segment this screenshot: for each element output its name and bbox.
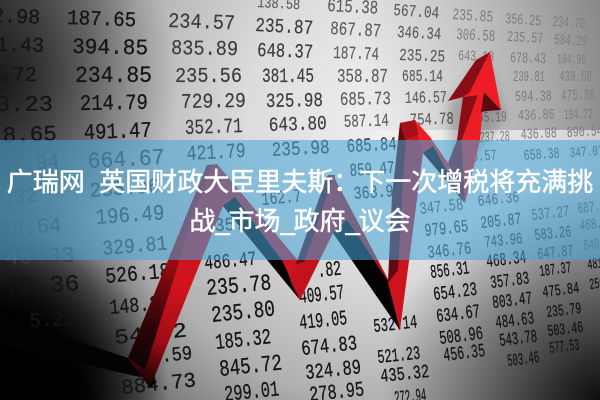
table of numbers: 148.32 — [109, 293, 170, 321]
table of numbers: 436.86 — [518, 107, 555, 125]
table of numbers: 526.18 — [104, 259, 171, 290]
table of numbers: 647.87 — [537, 242, 574, 264]
table of numbers: 835.89 — [171, 38, 238, 62]
arrow: second rising dark side — [296, 176, 333, 264]
table of numbers: 187.37 — [538, 259, 572, 281]
table of numbers: 979.65 — [424, 217, 469, 242]
table of numbers: 678.43 — [510, 50, 546, 68]
arrow: shaft bright face — [462, 92, 484, 203]
table of numbers: 358.87 — [337, 66, 388, 88]
table of numbers: 196.49 — [95, 201, 165, 231]
table of numbers: 468.34 — [485, 248, 527, 273]
table of numbers: 185.32 — [214, 325, 272, 356]
table of numbers: 346.76 — [427, 239, 472, 264]
table of numbers: 235.57 — [507, 29, 544, 48]
table of numbers: 235.56 — [175, 66, 242, 89]
arrow: third rising face — [388, 120, 423, 330]
table of numbers: 643.18 — [458, 48, 494, 66]
table of numbers: 347.58 — [419, 196, 464, 220]
table of numbers: 357.83 — [489, 269, 530, 294]
table of numbers: 646.36 — [477, 189, 520, 211]
table of numbers: 356.25 — [505, 11, 542, 30]
table of numbers: 234.85 — [75, 63, 152, 89]
table of numbers: 685.14 — [402, 68, 443, 87]
table of numbers: 685.84 — [346, 133, 397, 158]
table of numbers: 845.72 — [218, 351, 283, 383]
table of numbers: 187.65 — [67, 8, 137, 33]
table of numbers: 754.78 — [410, 110, 454, 131]
table of numbers: 421.79 — [186, 141, 246, 167]
table of numbers: 324.89 — [304, 357, 362, 386]
table of numbers: 306.58 — [456, 26, 496, 46]
table of numbers: 648.37 — [257, 40, 314, 65]
table of numbers: 486.47 — [204, 249, 257, 276]
arrow soft shadow — [448, 60, 505, 190]
table of numbers: 674.83 — [300, 333, 358, 362]
arrow: second falling face — [333, 175, 400, 330]
arrow: third falling face — [415, 120, 465, 203]
table of numbers: 45.33 — [4, 244, 75, 271]
table of numbers: 685.73 — [340, 88, 391, 111]
table of numbers: 475.84 — [541, 280, 580, 302]
table of numbers: 643.80 — [268, 113, 327, 138]
table of numbers: 235.80 — [210, 296, 276, 329]
table of numbers: 503.46 — [506, 349, 540, 372]
table of numbers: 214.79 — [80, 91, 148, 117]
table of numbers: 352.71 — [184, 116, 243, 141]
arrow: first rising bright face — [128, 164, 223, 388]
arrow: shaft dark side — [448, 95, 478, 203]
table of numbers: 162.7 — [261, 186, 302, 211]
table of numbers: 456.35 — [442, 340, 486, 367]
table of numbers: 537.27 — [531, 203, 570, 225]
table of numbers: 329.81 — [102, 233, 168, 262]
table of numbers: 235.25 — [399, 47, 445, 68]
table of numbers: 664.67 — [87, 145, 165, 175]
table of numbers: 38.64 — [0, 214, 62, 243]
table of numbers: 436.08 — [520, 125, 557, 144]
table of numbers: .82 — [316, 259, 343, 284]
table of numbers: 237.28 — [479, 128, 510, 147]
table of numbers: 729.29 — [181, 91, 246, 115]
table of numbers: 521.23 — [376, 343, 421, 369]
table of numbers: 491.47 — [83, 119, 152, 146]
translucent blue band — [0, 140, 600, 260]
table of numbers: 146.57 — [405, 89, 447, 109]
table of numbers: 5.21 — [29, 309, 75, 334]
table of numbers: 8.65 — [2, 122, 57, 149]
arrow: first falling face — [212, 164, 318, 300]
arrow: third rising dark side — [388, 122, 407, 283]
table of numbers: 368.9 — [353, 182, 394, 205]
table of numbers: .72 — [0, 65, 37, 88]
arrow: head right underside — [481, 92, 501, 112]
table of numbers: 484.63 — [494, 309, 535, 334]
arrow: second rising face — [290, 175, 335, 300]
table of numbers: 867.87 — [330, 18, 382, 43]
arrow: first falling shade — [223, 197, 300, 300]
arrow: first rising dark side — [128, 165, 212, 370]
arrow: black falling segment — [0, 315, 157, 388]
table of numbers: 187.74 — [333, 44, 379, 66]
table of numbers: 235.2 — [204, 213, 255, 238]
table of numbers: 803.47 — [491, 289, 533, 314]
table of numbers: 239.81 — [513, 69, 545, 86]
arrow: head left dark face — [448, 52, 490, 101]
table of numbers: 859.47 — [349, 159, 395, 182]
table of numbers: 235.96 — [89, 176, 160, 204]
table of numbers: 583.26 — [534, 223, 572, 245]
table of numbers: 235.85 — [452, 6, 494, 27]
table of numbers: 594.38 — [515, 88, 552, 106]
table of numbers: 17.94 — [0, 150, 60, 178]
table of numbers: .59 — [160, 343, 194, 369]
table of numbers: 634.67 — [435, 301, 481, 328]
arrow: peak top — [400, 120, 420, 140]
table of numbers: 419.05 — [298, 308, 348, 336]
table of numbers: 543.78 — [498, 327, 538, 352]
table of numbers: 346.34 — [397, 24, 442, 45]
table of numbers: 235.98 — [271, 137, 330, 163]
table of numbers: 54.82 — [113, 320, 188, 351]
arrow: second falling shade — [333, 220, 400, 330]
table of numbers: 532.14 — [372, 311, 418, 338]
arrow: head bright face — [463, 52, 501, 110]
table of numbers: 654.23 — [432, 279, 478, 306]
table of numbers: 235.87 — [255, 15, 314, 41]
table of numbers: 65.19 — [478, 109, 507, 127]
arrow: third falling shade — [423, 146, 465, 203]
table of numbers: 394.85 — [72, 35, 148, 61]
table of numbers: 743.96 — [484, 230, 523, 252]
table of numbers: 587.14 — [344, 111, 389, 133]
table of numbers: 381.45 — [262, 66, 314, 89]
table of numbers: 78.36 — [4, 271, 80, 301]
table of numbers: 234.57 — [168, 11, 236, 36]
table of numbers: 435.32 — [379, 361, 430, 388]
table of numbers: 235.78 — [205, 270, 272, 302]
rising zigzag arrow — [0, 52, 505, 388]
table of numbers: 658.38 — [523, 146, 560, 165]
table of numbers: 567.04 — [393, 2, 440, 24]
table of numbers: 325.98 — [266, 90, 323, 114]
table of numbers: 856.31 — [429, 257, 470, 284]
table of numbers: 409.57 — [298, 282, 345, 310]
title: 广瑞网 英国财政大臣里夫斯：下一次增税将充满挑 战_市场_政府_议会 — [7, 167, 593, 236]
table of numbers: 438.57 — [459, 147, 497, 167]
table of numbers: 508.96 — [438, 323, 484, 350]
table of numbers: 205.87 — [480, 211, 522, 234]
